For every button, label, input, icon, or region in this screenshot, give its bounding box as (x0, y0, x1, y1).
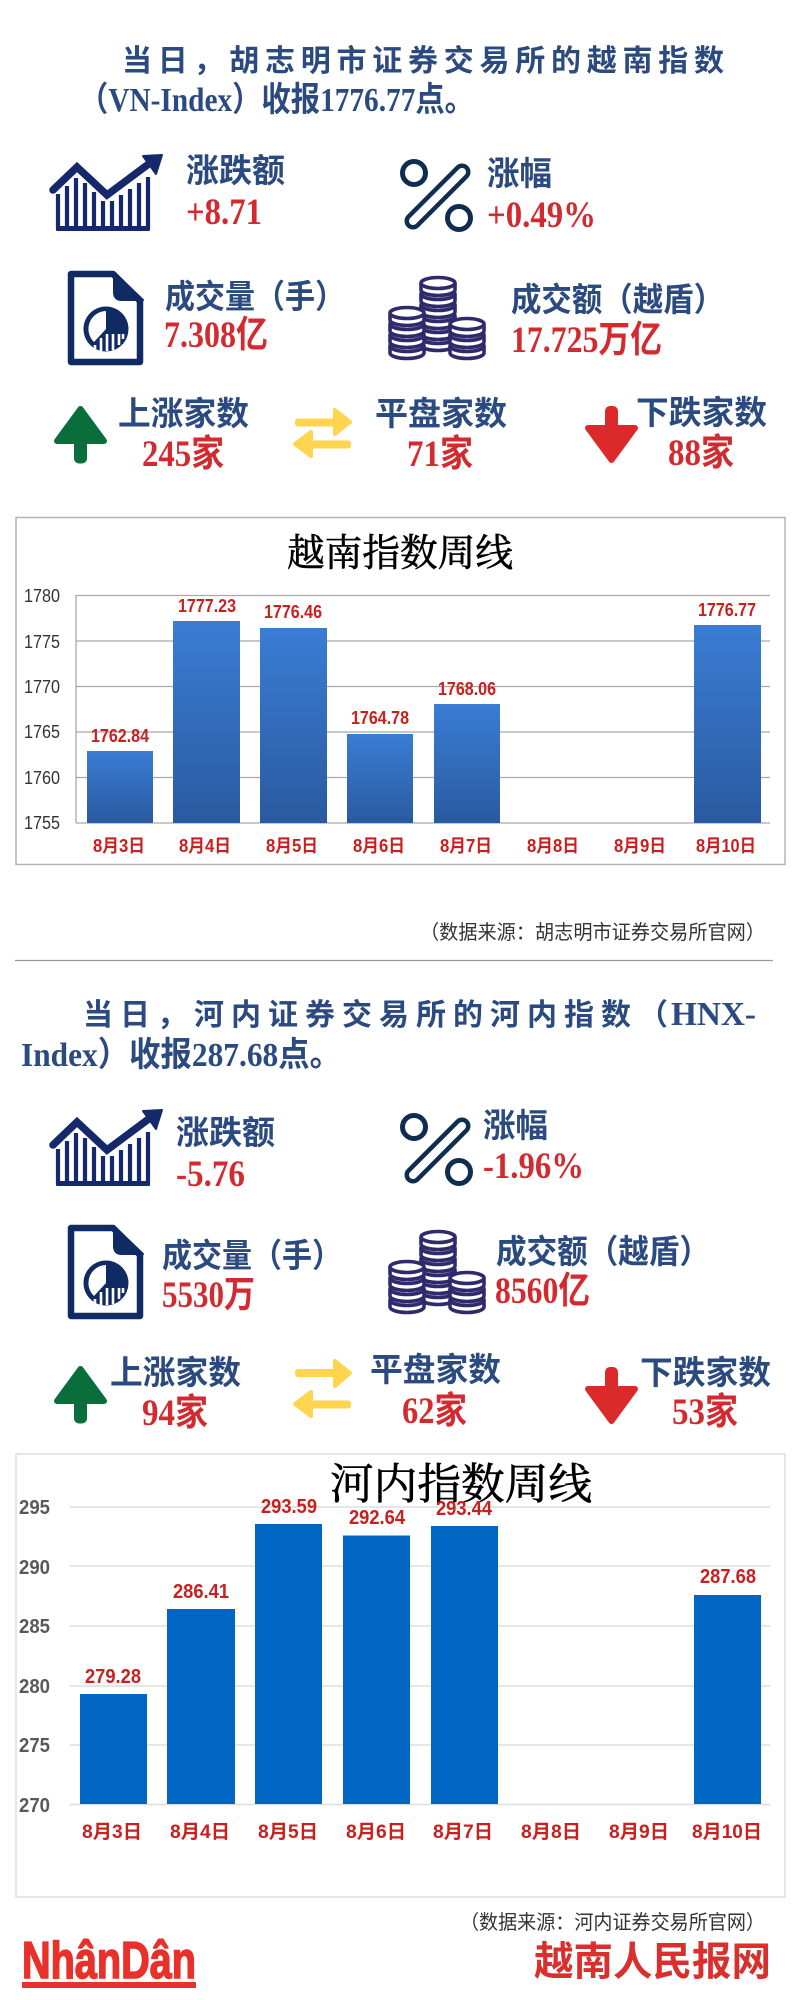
stat: decliners: 53家 (672, 1391, 738, 1433)
icon: percent (402, 162, 470, 230)
y axis labels: 1780 (24, 586, 60, 606)
title: VN-Index summary (79, 45, 724, 119)
icon: document (71, 1226, 143, 1316)
y axis labels: 295 (19, 1497, 50, 1519)
stat: turnover (495, 1234, 710, 1312)
stat: volume: 成交量（手） (165, 279, 345, 316)
icon: down arrow (588, 1367, 635, 1421)
stat: unchanged: 平盘家数 (370, 1352, 501, 1389)
stat: change amount: 涨跌额 (176, 1115, 275, 1152)
stat: change percent: +0.49% (487, 195, 596, 236)
stat: change amount (186, 153, 285, 233)
x axis labels: 8月10日 (696, 836, 756, 856)
stat: advancers (110, 1355, 241, 1434)
y axis labels (24, 586, 60, 833)
brand: Vietnamese People's Daily online: 越南人民报网 (534, 1929, 771, 1987)
panel: VN-Index stats (53, 153, 767, 475)
x axis labels: 8月10日 (692, 1822, 762, 1843)
bar value labels: 1776.77 (698, 600, 756, 620)
bar value labels (85, 1496, 756, 1688)
x axis labels: 8月6日 (346, 1822, 406, 1843)
stat: decliners (640, 1355, 771, 1433)
y axis labels (19, 1497, 50, 1817)
bar value labels: 1764.78 (351, 708, 409, 728)
stat: advancers: 245家 (142, 433, 224, 475)
title: VN-Index summary: 当日，胡志明市证券交易所的越南指数 (122, 45, 724, 78)
bar value labels: 292.64 (349, 1507, 406, 1529)
stat: decliners (636, 395, 767, 474)
title: HNX-Index summary: HNX- (671, 996, 756, 1033)
x axis labels (93, 836, 756, 856)
x axis labels: 8月9日 (609, 1822, 669, 1843)
stat: advancers: 上涨家数 (118, 396, 249, 433)
x axis labels: 8月5日 (258, 1822, 318, 1843)
icon: down arrow (588, 406, 635, 460)
stat: change amount: +8.71 (186, 192, 262, 233)
x axis labels: 8月3日 (93, 836, 145, 856)
x axis labels: 8月6日 (353, 836, 405, 856)
x axis labels: 8月8日 (521, 1822, 581, 1843)
x axis labels: 8月9日 (614, 836, 666, 856)
title: HNX-Index summary: 当日，河内证券交易所的河内指数（ (83, 999, 668, 1032)
stat: decliners: 下跌家数 (636, 395, 767, 432)
y axis labels: 1755 (24, 813, 60, 833)
stat: volume: 5530万 (162, 1275, 255, 1316)
x axis labels: 8月7日 (433, 1822, 493, 1843)
y axis labels: 1760 (24, 768, 60, 788)
stat: advancers (118, 396, 249, 475)
source note 2: （数据来源：河内证券交易所官网） (460, 1906, 765, 1935)
title: HNX-Index summary (21, 996, 756, 1074)
bars (87, 621, 761, 823)
bar value labels: 1762.84 (91, 726, 149, 746)
icon: rising chart (53, 1110, 162, 1186)
stat: turnover: 成交额（越盾） (511, 282, 724, 319)
stat: unchanged (375, 396, 507, 475)
logo: Nhan Dan: NhânDân (22, 1932, 196, 1990)
stat: turnover (511, 282, 724, 361)
stat: volume (164, 279, 345, 356)
bar value labels: 1777.23 (178, 596, 236, 616)
x axis labels (82, 1822, 762, 1843)
icon: up arrow (57, 1369, 104, 1424)
panel: HNX-Index stats (53, 1108, 771, 1434)
x axis labels: 8月4日 (179, 836, 231, 856)
y axis labels: 1765 (24, 722, 60, 742)
stat: volume: 7.308亿 (164, 314, 268, 356)
stat: unchanged: 平盘家数 (375, 396, 507, 433)
stat: advancers: 上涨家数 (110, 1355, 241, 1392)
y axis labels: 285 (19, 1616, 50, 1638)
bar value labels: 279.28 (85, 1666, 141, 1688)
y axis labels: 1770 (24, 677, 60, 697)
stat: turnover: 17.725万亿 (511, 319, 662, 361)
icon: up arrow (57, 409, 104, 464)
x axis labels: 8月8日 (527, 836, 579, 856)
icon: rising chart (53, 155, 162, 231)
x axis labels: 8月7日 (440, 836, 492, 856)
stat: volume: 成交量（手） (162, 1238, 342, 1275)
title: VN-Index summary: （VN-Index）收报1776.77点。 (79, 81, 474, 119)
stat: change percent: 涨幅 (483, 1108, 548, 1145)
chart: VN-Index weekly (16, 518, 785, 864)
bar value labels: 1768.06 (438, 679, 496, 699)
x axis labels: 8月3日 (82, 1822, 142, 1843)
stat: change percent (487, 156, 596, 236)
stat: turnover: 8560亿 (495, 1270, 590, 1312)
stat: unchanged (370, 1352, 501, 1432)
x axis labels: 8月4日 (170, 1822, 230, 1843)
icon: exchange arrows (295, 1361, 351, 1416)
icon: percent (402, 1116, 470, 1184)
bar value labels (91, 596, 756, 746)
stat: turnover: 成交额（越盾） (496, 1234, 710, 1271)
chart: HNX-Index weekly (16, 1451, 785, 1897)
chart title: 河内指数周线 (330, 1451, 592, 1512)
icon: coins (390, 278, 484, 358)
bar value labels: 286.41 (173, 1581, 229, 1603)
y axis labels: 275 (19, 1735, 50, 1757)
bars (80, 1524, 761, 1804)
stat: change percent: -1.96% (483, 1146, 584, 1187)
stat: decliners: 下跌家数 (640, 1355, 771, 1392)
stat: change amount: -5.76 (176, 1154, 245, 1195)
stat: decliners: 88家 (668, 432, 734, 474)
icon: coins (390, 1232, 484, 1312)
y axis labels: 1775 (24, 632, 60, 652)
icon: exchange arrows (295, 410, 351, 456)
bar value labels: 293.59 (261, 1496, 317, 1518)
stat: change amount: 涨跌额 (186, 153, 285, 190)
source note 1: （数据来源：胡志明市证券交易所官网） (420, 916, 765, 945)
y axis labels: 270 (19, 1795, 50, 1817)
stat: advancers: 94家 (142, 1392, 208, 1434)
stat: change percent: 涨幅 (487, 156, 552, 193)
chart title: 越南指数周线 (287, 522, 513, 577)
stat: unchanged: 71家 (407, 433, 473, 475)
x axis labels: 8月5日 (266, 836, 318, 856)
stat: unchanged: 62家 (402, 1390, 467, 1432)
bar value labels: 287.68 (700, 1566, 756, 1588)
stat: change amount (176, 1115, 275, 1195)
title: HNX-Index summary: Index）收报287.68点。 (21, 1036, 341, 1074)
stat: change percent (483, 1108, 584, 1187)
bar value labels: 293.44 (436, 1498, 493, 1520)
y axis labels: 280 (19, 1676, 50, 1698)
stat: volume (162, 1238, 342, 1316)
y axis labels: 290 (19, 1557, 50, 1579)
bar value labels: 1776.46 (264, 602, 322, 622)
icon: document (71, 272, 143, 362)
